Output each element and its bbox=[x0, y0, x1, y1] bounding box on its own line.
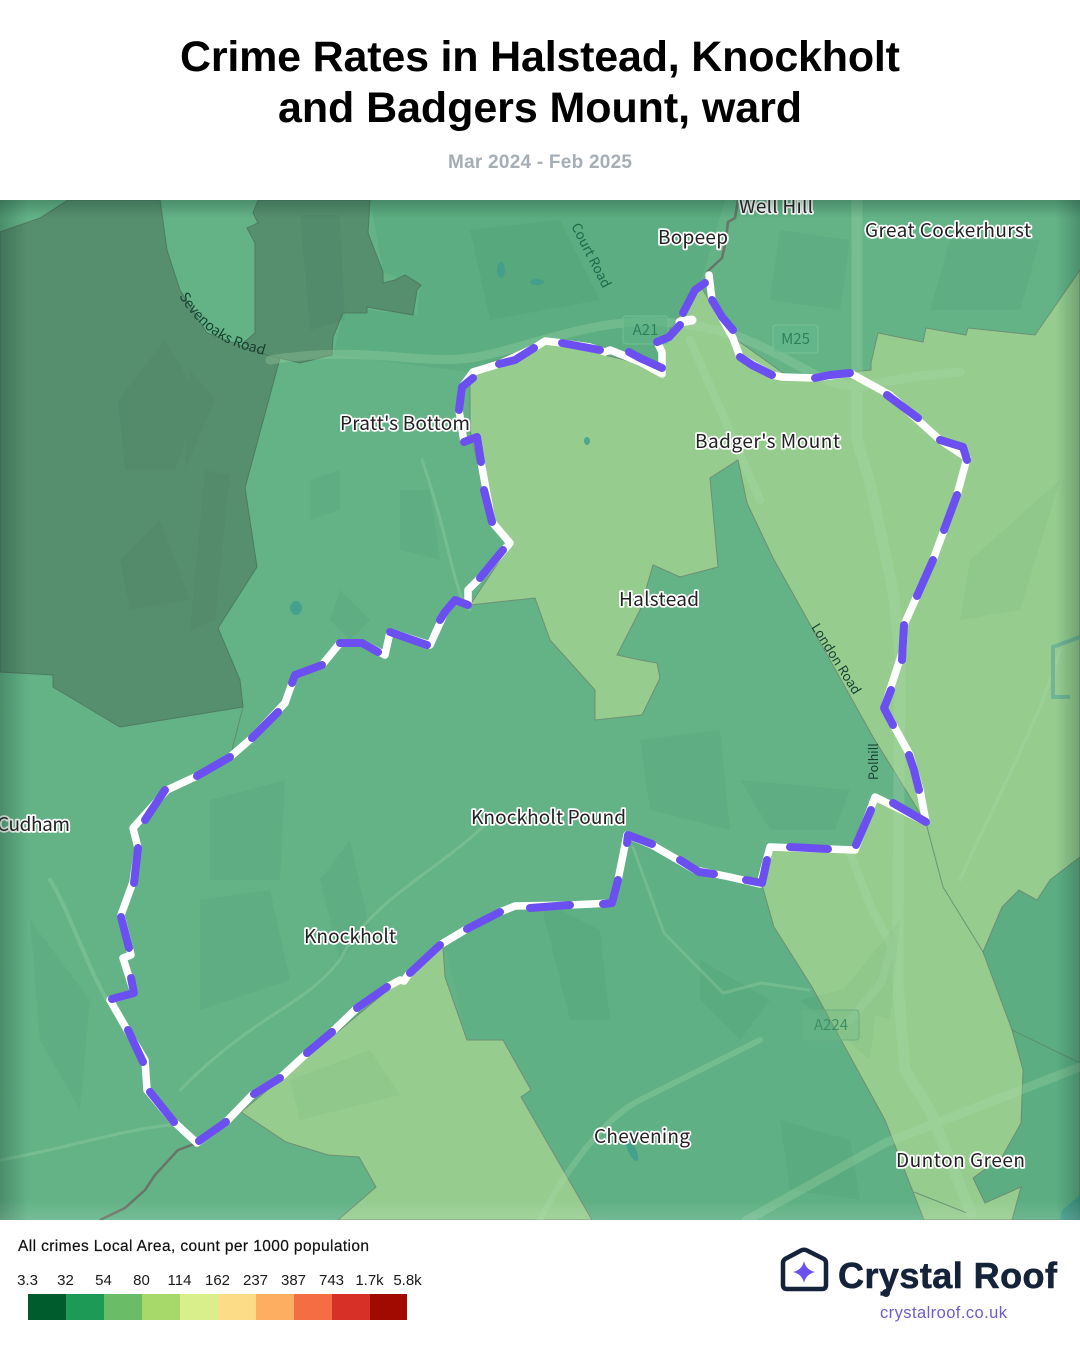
region: north central darker green bbox=[333, 200, 725, 372]
legend ticks: 3.3 bbox=[17, 1272, 38, 1289]
road label: Polhill: Polhill bbox=[863, 743, 882, 780]
legend colour bar bbox=[28, 1294, 407, 1320]
region outlines bbox=[232, 707, 1080, 1213]
legend ticks: 162 bbox=[205, 1272, 230, 1289]
place labels: Dunton Green bbox=[896, 1146, 1025, 1173]
texture: field patches bbox=[30, 215, 1060, 1200]
road shield: A224 bbox=[802, 1010, 859, 1040]
road shield: A21 bbox=[623, 316, 668, 344]
roads bbox=[0, 200, 1080, 1220]
ward boundary: white junction blob bbox=[680, 320, 692, 322]
region: north dark green strip bbox=[243, 200, 421, 363]
road shield: M25: M25 bbox=[781, 328, 810, 349]
region: light green Badger's Mount, Halstead and east bbox=[470, 270, 1080, 1220]
road label: Sevenoaks Road: Sevenoaks Road bbox=[180, 292, 266, 355]
place labels: Knockholt bbox=[304, 922, 396, 949]
road shield: A21: A21 bbox=[633, 319, 658, 340]
legend title: All crimes Local Area, count per 1000 population bbox=[18, 1238, 369, 1255]
logo wordmark: y key ring bbox=[883, 1290, 889, 1296]
legend ticks: 1.7k bbox=[355, 1272, 384, 1289]
place labels: Badger's Mount bbox=[695, 427, 840, 454]
map base: mid-green crime area bbox=[0, 200, 1080, 1220]
road shields bbox=[623, 316, 859, 1040]
map vignette bbox=[0, 200, 1080, 1220]
region: light green south west bbox=[241, 947, 592, 1220]
place labels: Great Cockerhurst bbox=[865, 216, 1031, 243]
legend ticks: 80 bbox=[133, 1272, 150, 1289]
legend ticks: 5.8k bbox=[393, 1272, 422, 1289]
road label: London Road: London Road bbox=[808, 619, 866, 698]
road shield: A224: A224 bbox=[814, 1014, 848, 1035]
title: and Badgers Mount, ward bbox=[278, 84, 802, 132]
water features bbox=[290, 262, 1080, 1220]
place labels: Chevening bbox=[594, 1122, 690, 1149]
road shield: M25 bbox=[773, 325, 818, 353]
place labels: Halstead bbox=[619, 585, 699, 612]
logo wordmark: Crystal Roof bbox=[838, 1255, 1058, 1296]
region: south Chevening green bbox=[445, 835, 924, 1220]
legend ticks bbox=[17, 1272, 422, 1289]
place labels bbox=[0, 192, 1031, 1173]
logo url: crystalroof.co.uk bbox=[880, 1304, 1008, 1322]
legend ticks: 743 bbox=[319, 1272, 344, 1289]
title bbox=[180, 33, 900, 132]
region: western dark green bbox=[0, 200, 280, 727]
ward boundary: purple dashes bbox=[112, 283, 967, 1141]
legend ticks: 387 bbox=[281, 1272, 306, 1289]
legend ticks: 114 bbox=[168, 1272, 191, 1289]
logo: Crystal Roof bbox=[783, 1250, 1058, 1322]
icon: house with star bbox=[783, 1250, 826, 1289]
map bbox=[0, 200, 1080, 1220]
title: Crime Rates in Halstead, Knockholt bbox=[180, 33, 900, 81]
place labels: Well Hill bbox=[739, 192, 813, 219]
legend bbox=[17, 1238, 422, 1320]
place labels: Pratt's Bottom bbox=[340, 409, 470, 436]
place labels: Knockholt Pound bbox=[471, 803, 626, 830]
place labels: Bopeep bbox=[658, 223, 728, 250]
legend ticks: 237 bbox=[243, 1272, 268, 1289]
ward boundary: white base line bbox=[110, 275, 967, 1143]
region: east edge green bbox=[973, 857, 1080, 1220]
river at east edge bbox=[1053, 637, 1080, 697]
subtitle: date range: Mar 2024 - Feb 2025 bbox=[448, 152, 632, 173]
outer boundary stubs: footpaths beyond ward bbox=[100, 200, 738, 1220]
road label: Court Road: Court Road bbox=[567, 219, 617, 291]
legend ticks: 54 bbox=[95, 1272, 112, 1289]
legend ticks: 32 bbox=[57, 1272, 74, 1289]
